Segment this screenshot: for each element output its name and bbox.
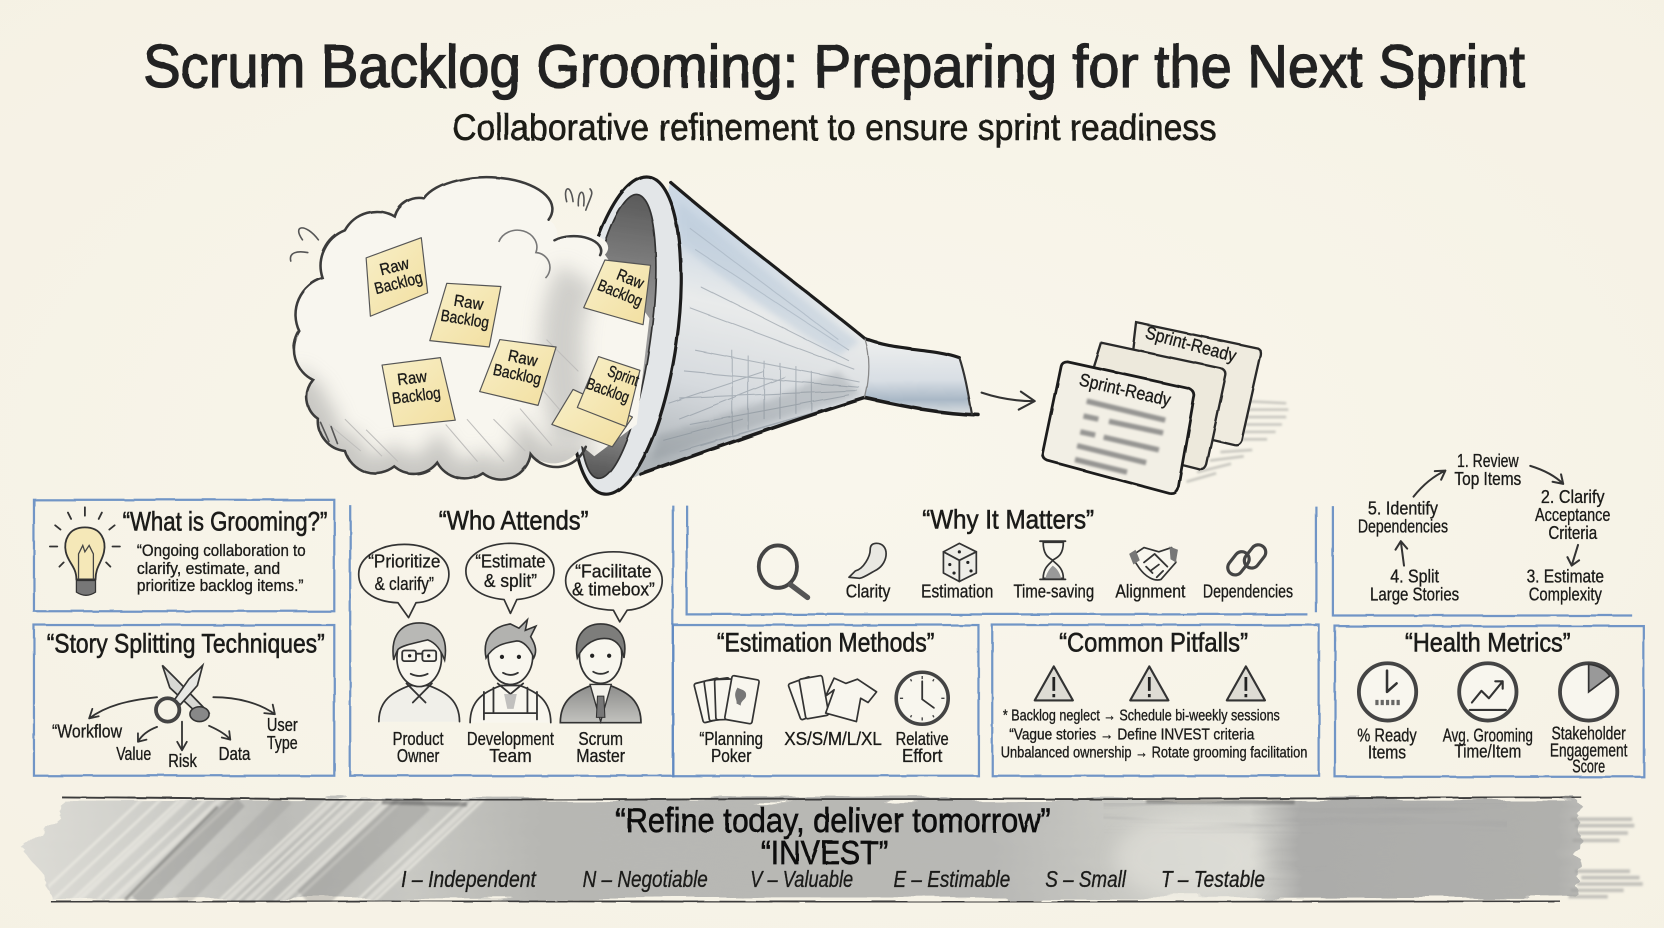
labels: Stakeholder [1552, 724, 1626, 744]
labels: Avg. Grooming [1443, 726, 1533, 746]
brush band [23, 797, 1643, 902]
sticky note: Raw Backlog 2: Raw [452, 292, 485, 314]
description: clarify, estimate, and [137, 560, 280, 578]
gauge: grooming time [1459, 663, 1516, 721]
sticky note: Raw Backlog 3: Backlog [391, 384, 442, 408]
invest letters: N – Negotiable [583, 866, 708, 892]
sticky note: Raw Backlog 4: Backlog [491, 361, 543, 389]
card text lines [1075, 401, 1165, 472]
labels: % Ready [1357, 726, 1417, 746]
sticky note: Raw Backlog 2: Backlog [439, 307, 490, 332]
card label: front: Sprint-Ready [1077, 370, 1173, 410]
step 4: 4. Split [1390, 567, 1439, 587]
role labels: Product [393, 729, 444, 749]
labels: Time/Item [1454, 742, 1521, 762]
sticky note: Raw Backlog 5 [584, 260, 651, 325]
speech bubble: scrum master [566, 552, 662, 622]
invest letters: E – Estimable [894, 866, 1010, 892]
labels: Clarity [846, 581, 890, 601]
icon: t-shirt sizes [788, 675, 877, 722]
role labels: Scrum [578, 729, 623, 749]
card label: back: Sprint-Ready [1143, 322, 1239, 366]
speech bubble: product owner [359, 544, 449, 618]
card: front [1043, 362, 1194, 494]
labels: Relative [896, 729, 949, 749]
step 1: Top Items [1454, 469, 1521, 489]
role labels: Master [576, 746, 625, 766]
icon: warning triangles [1035, 666, 1265, 700]
pitfall list: * Backlog neglect → Schedule bi-weekly sessions [1003, 708, 1280, 725]
title: Scrum Backlog Grooming: Preparing for the Next Sprint [143, 32, 1525, 100]
panel: health metrics [1335, 626, 1644, 777]
icon: light bulb [50, 507, 120, 595]
heading: “Why It Matters” [922, 504, 1094, 534]
sticky note: Sprint Backlog [577, 357, 642, 427]
sticky note: Raw Backlog 3: Raw [396, 368, 428, 389]
card: middle [1072, 343, 1226, 470]
labels [1357, 724, 1627, 777]
person: product owner [379, 623, 460, 722]
speech bubble: scrum master: “Facilitate [575, 561, 652, 581]
icon: dice [943, 543, 976, 582]
card: back [1125, 323, 1261, 445]
sticky note: Raw Backlog 1: Backlog [373, 269, 424, 298]
pitfall list: Unbalanced ownership → Rotate grooming facilitation [1001, 745, 1307, 762]
step 2 [1535, 487, 1610, 543]
step 2: Acceptance [1535, 505, 1610, 525]
step 5: 5. Identify [1368, 499, 1438, 519]
panel: why it matters [687, 504, 1316, 614]
icon: magnifier [759, 545, 808, 597]
heading: “Health Metrics” [1405, 628, 1571, 658]
icon: hourglass [1040, 541, 1065, 579]
invest letters: T – Testable [1161, 866, 1265, 892]
invest letters [401, 866, 1265, 892]
sticky note: Raw Backlog 5: Backlog [595, 276, 645, 311]
step 3: Complexity [1529, 585, 1602, 605]
sticky note: Raw Backlog 3 [382, 358, 455, 427]
labels: Score [1572, 757, 1605, 777]
step 3: 3. Estimate [1527, 567, 1604, 587]
panel: story splitting techniques [34, 625, 334, 776]
icon: scissors [156, 665, 209, 722]
step 2: Criteria [1548, 523, 1598, 543]
sticky note: Sprint Backlog: Sprint [605, 362, 642, 390]
funnel body [553, 170, 978, 501]
icon: handshake [1129, 547, 1178, 580]
panel: who attends [350, 505, 673, 776]
labels: Time-saving [1013, 581, 1094, 601]
step 5 [1358, 499, 1448, 537]
speech bubble: development team: “Estimate [475, 552, 545, 572]
labels: Value [116, 744, 151, 764]
labels: “Planning [699, 729, 763, 749]
sticky note: Raw Backlog 1 [366, 238, 428, 316]
heading: “Estimation Methods” [717, 628, 934, 658]
heading: “Common Pitfalls” [1059, 628, 1248, 658]
sticky note: Raw Backlog 2 [430, 283, 501, 347]
labels [846, 581, 1293, 601]
labels: Poker [711, 746, 751, 766]
gauge: engagement score [1560, 663, 1617, 721]
icon: clarity [849, 543, 886, 578]
labels: Effort [902, 746, 942, 766]
description: prioritize backlog items.” [137, 577, 304, 595]
labels [699, 729, 949, 766]
role labels: Owner [397, 746, 439, 766]
speech bubble: development team: & split” [484, 571, 537, 591]
icon: chain [1225, 542, 1269, 578]
sticky note: Raw Backlog 4: Raw [506, 347, 539, 371]
step 5: Dependencies [1358, 517, 1448, 537]
role labels: Team [489, 746, 532, 766]
labels: Estimation [921, 581, 993, 601]
invest letters: I – Independent [401, 866, 537, 892]
decorative diagonal strokes omitted from labels [32, 798, 485, 902]
heading: “What is Grooming?” [123, 507, 327, 537]
sticky note: Raw Backlog 5: Raw [614, 266, 646, 293]
speech bubble: development team [466, 543, 554, 613]
pitfall list: “Vague stories → Define INVEST criteria [1009, 727, 1255, 744]
labels: Risk [168, 751, 198, 771]
speech bubble: scrum master: & timebox” [572, 579, 655, 599]
heading: “Who Attends” [439, 506, 588, 536]
panel: common pitfalls [992, 625, 1319, 776]
icon: planning poker cards [694, 675, 759, 724]
labels: Dependencies [1203, 581, 1293, 601]
step 1 [1454, 451, 1521, 489]
step 4: Large Stories [1370, 585, 1459, 605]
invest letters: V – Valuable [750, 866, 853, 892]
labels [52, 715, 298, 771]
step 4 [1370, 567, 1459, 605]
step 3 [1527, 567, 1604, 605]
sprint-ready cards [1043, 322, 1288, 494]
sticky note: Sprint Backlog: Backlog [584, 375, 632, 407]
subtitle: Collaborative refinement to ensure sprint readiness [452, 106, 1216, 148]
footer banner: invest [23, 797, 1643, 902]
labels: Alignment [1115, 581, 1185, 601]
pitfall list [1001, 708, 1307, 762]
arrow: funnel to cards [982, 392, 1035, 410]
panel: what is grooming [34, 500, 334, 611]
invest letters: S – Small [1045, 866, 1127, 892]
step 1: 1. Review [1457, 451, 1519, 471]
labels: “Workflow [52, 722, 123, 742]
role labels: Development [467, 729, 554, 749]
gauge: percent ready [1359, 663, 1416, 721]
panel: grooming cycle [1333, 451, 1632, 615]
cycle arrows [1396, 466, 1579, 566]
labels: Engagement [1550, 741, 1627, 761]
sticky note: Raw Backlog 4 [480, 340, 556, 405]
illustration: funnel refining backlog cloud [290, 170, 1035, 501]
icon: clock [896, 672, 948, 724]
labels: Items [1368, 743, 1406, 763]
role labels [393, 729, 625, 766]
invest heading: “INVEST” [761, 834, 888, 871]
sticky note: partly hidden [552, 389, 632, 447]
backlog cloud [290, 177, 649, 480]
speech bubble: product owner: “Prioritize [368, 552, 440, 572]
description [137, 542, 306, 595]
person: development team [470, 620, 551, 723]
description: “Ongoing collaboration to [137, 542, 306, 560]
person: scrum master [560, 624, 641, 723]
heading: “Story Splitting Techniques” [47, 629, 325, 659]
sticky note: Raw Backlog 1: Raw [378, 255, 411, 279]
labels: Type [267, 733, 298, 753]
speech bubble: product owner: & clarify” [375, 574, 434, 594]
labels: Data [219, 744, 251, 764]
panel: estimation methods [673, 625, 978, 776]
labels: User [267, 715, 298, 735]
step 2: 2. Clarify [1541, 487, 1605, 507]
split arrows [89, 697, 275, 750]
labels: XS/S/M/L/XL [784, 729, 882, 749]
tagline: “Refine today, deliver tomorrow” [616, 802, 1051, 840]
